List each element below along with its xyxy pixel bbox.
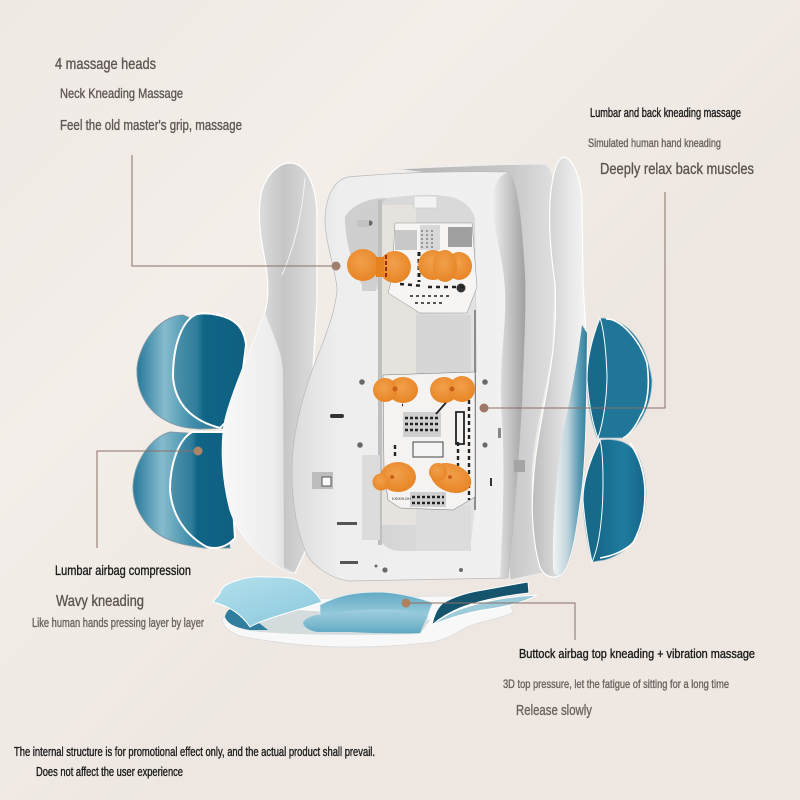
central window xyxy=(380,290,475,551)
lower massage heads xyxy=(372,376,476,498)
callout line: neck kneading xyxy=(132,155,340,270)
cushion grey rear xyxy=(222,163,317,573)
left airbag group xyxy=(133,313,246,548)
lower left airbag xyxy=(133,432,235,548)
frame outer xyxy=(292,172,525,581)
small clip on frame xyxy=(312,472,333,489)
frame screw brackets xyxy=(357,220,369,227)
seat middle airbag xyxy=(320,592,433,620)
text: neck kneading callout xyxy=(55,56,242,134)
left side cushion xyxy=(222,163,317,573)
text: neck kneading callout: Neck Kneading Massage xyxy=(60,85,183,101)
text: neck kneading callout: Feel the old master's grip, massage xyxy=(60,118,242,134)
top label tab xyxy=(414,196,437,208)
callout line: buttock airbag xyxy=(402,598,575,640)
text: lumbar airbag callout: Wavy kneading xyxy=(56,593,144,610)
text: back kneading callout: Simulated human hand kneading xyxy=(588,136,721,150)
lower mechanism: KS009-DH xyxy=(392,496,411,501)
frame holes xyxy=(357,220,488,573)
lower mechanism xyxy=(383,372,475,510)
upper massage heads xyxy=(347,249,472,283)
inner opening xyxy=(345,195,477,372)
callout line: lumbar airbag xyxy=(97,446,202,548)
text: buttock airbag callout xyxy=(503,647,755,719)
upper right airbag xyxy=(587,318,652,438)
disclaimer text xyxy=(14,745,375,779)
callout line: back kneading xyxy=(480,192,665,412)
lower right airbag xyxy=(583,439,646,562)
text: buttock airbag callout: Buttock airbag top kneading + vibration massage xyxy=(519,647,755,661)
upper mechanism xyxy=(388,223,477,313)
right back shell xyxy=(396,164,555,580)
text: lumbar airbag callout: Lumbar airbag compression xyxy=(55,562,191,578)
orange massage heads xyxy=(347,249,476,498)
upper left airbag xyxy=(137,313,246,429)
text: buttock airbag callout: 3D top pressure, let the fatigue of sitting for a long time xyxy=(503,677,729,691)
seat cushion xyxy=(213,577,537,647)
seat right airbag flaps xyxy=(432,582,529,625)
text: neck kneading callout: 4 massage heads xyxy=(55,56,156,73)
seat base xyxy=(222,596,513,647)
frame right groove xyxy=(493,173,525,578)
right side cushion xyxy=(532,157,587,577)
disclaimer text: Does not affect the user experience xyxy=(36,765,183,779)
right airbag group xyxy=(583,318,652,562)
recess under left column xyxy=(362,455,380,540)
text: back kneading callout: Deeply relax back muscles xyxy=(600,161,754,178)
grey accent on rear shell xyxy=(514,460,525,472)
disclaimer text: The internal structure is for promotional effect only, and the actual product shall prevail. xyxy=(14,745,375,759)
text: back kneading callout xyxy=(588,106,754,178)
seat left airbag flap xyxy=(213,577,322,627)
text: lumbar airbag callout xyxy=(32,562,204,630)
text: back kneading callout: Lumbar and back kneading massage xyxy=(590,106,741,120)
text: lumbar airbag callout: Like human hands pressing layer by layer xyxy=(32,616,204,630)
cushion white front xyxy=(222,312,295,573)
main frame xyxy=(292,172,525,581)
text: buttock airbag callout: Release slowly xyxy=(516,702,592,719)
